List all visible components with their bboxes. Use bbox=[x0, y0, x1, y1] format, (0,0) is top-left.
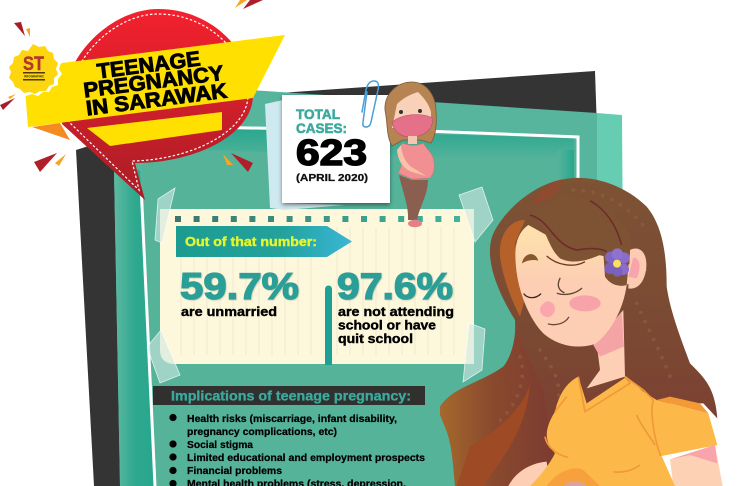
title banner bbox=[25, 35, 285, 127]
list: implications bbox=[170, 413, 425, 486]
arrow banner: out of that number bbox=[176, 226, 352, 257]
list: implications: Health risks (miscarriage, infant disability, bbox=[187, 413, 397, 425]
divider bbox=[325, 286, 332, 365]
hair left lower bbox=[440, 320, 553, 486]
statistic: 97.6% not attending school: are not attending bbox=[338, 305, 454, 319]
belly patch bbox=[547, 468, 600, 486]
banner fold bbox=[32, 123, 70, 140]
decorative sparks bbox=[0, 0, 263, 172]
title text: PREGNANCY bbox=[82, 62, 225, 102]
subtitle bar bbox=[87, 112, 222, 146]
title text: IN SARAWAK bbox=[85, 80, 228, 120]
badge: ST infographic bbox=[9, 44, 62, 96]
statistic: 59.7% unmarried: 59.7% bbox=[180, 266, 299, 307]
title text bbox=[82, 47, 228, 120]
hair bbox=[440, 178, 717, 486]
hair mottling bbox=[497, 190, 670, 423]
large illustrated girl bbox=[440, 178, 723, 486]
heading: implications: Implications of teenage pregnancy: bbox=[171, 388, 411, 404]
shirt bbox=[530, 377, 717, 486]
list: implications: Limited educational and employment prospects bbox=[187, 452, 425, 464]
eyebrow bbox=[522, 254, 538, 263]
face bbox=[515, 225, 647, 347]
teal back panel bbox=[114, 90, 623, 486]
dark back panel bbox=[76, 71, 597, 486]
icon: paperclip bbox=[362, 81, 378, 127]
ear bbox=[628, 249, 646, 289]
list: implications: pregnancy complications, etc) bbox=[187, 426, 337, 438]
neck bbox=[587, 310, 625, 388]
arrow banner: out of that number: Out of that number: bbox=[185, 234, 317, 249]
list: implications: Social stigma bbox=[187, 439, 253, 451]
nose bbox=[540, 301, 555, 317]
hair left upper bbox=[500, 220, 528, 317]
badge: ST infographic: INFOGRAPHIC bbox=[24, 74, 44, 78]
closed eyes bbox=[557, 278, 582, 294]
hand bbox=[508, 462, 550, 486]
small pregnant girl with mask bbox=[385, 82, 436, 227]
heading: implications bbox=[153, 386, 425, 405]
title text: TEENAGE bbox=[96, 47, 202, 83]
list: implications: Financial problems bbox=[187, 465, 282, 477]
statistic: 97.6% not attending school bbox=[337, 266, 454, 346]
hair back bbox=[385, 82, 436, 146]
statistic: 59.7% unmarried bbox=[180, 266, 299, 319]
arm bbox=[670, 445, 723, 486]
statistic: 97.6% not attending school: school or have bbox=[338, 318, 436, 332]
neck bbox=[408, 136, 417, 144]
shoes bbox=[408, 220, 422, 227]
badge: ST infographic: ST bbox=[23, 54, 44, 75]
fringe bbox=[532, 193, 631, 286]
statistic: 97.6% not attending school: 97.6% bbox=[337, 266, 453, 307]
flower bbox=[604, 248, 630, 277]
tape pieces bbox=[147, 187, 493, 383]
legs bbox=[399, 175, 428, 220]
mask bbox=[392, 115, 433, 137]
cheek bbox=[569, 295, 601, 311]
panel: notebook paper bbox=[160, 209, 474, 364]
inner teal panel with white border bbox=[142, 128, 578, 486]
panel: total cases card bbox=[265, 95, 390, 210]
teal gap below hair strand bbox=[440, 415, 455, 486]
notebook holes bbox=[175, 216, 460, 222]
speech bubble bbox=[61, 9, 253, 200]
statistic: 59.7% unmarried: are unmarried bbox=[181, 305, 277, 319]
pink top bbox=[398, 143, 434, 179]
panel: total cases card: TOTAL bbox=[296, 106, 340, 122]
mouth bbox=[548, 317, 569, 325]
panel: total cases card: 623 bbox=[296, 132, 367, 173]
statistic: 97.6% not attending school: quit school bbox=[338, 332, 413, 346]
panel: total cases card: CASES: bbox=[296, 120, 347, 136]
panel: total cases card: (APRIL 2020) bbox=[296, 172, 368, 184]
ruled lines bbox=[181, 227, 454, 355]
